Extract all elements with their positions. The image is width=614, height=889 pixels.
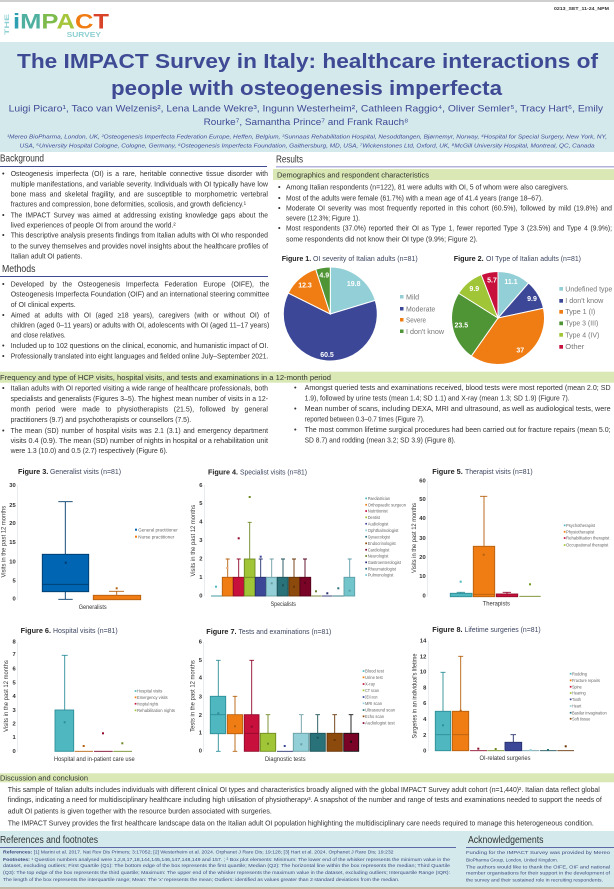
text: frequency left column: • (2, 384, 5, 392)
legend: figure 2: Undefined type (565, 284, 612, 294)
text: methods bullets: of OI clinical experts. (11, 300, 76, 309)
figure 8: lifetime surgeries box plot: 0 (423, 748, 426, 754)
text: methods bullets: • (2, 311, 5, 320)
legend: figure 3: General practitioner (138, 527, 178, 532)
text: frequency right column (294, 383, 611, 444)
text: results bullets (278, 183, 612, 243)
figure 3: generalist visits box plot: 10 (9, 560, 16, 566)
legend: figure 7: Audiologist test (365, 721, 395, 726)
figure 1: OI severity pie chart: 4.9 (319, 272, 329, 280)
title: The IMPACT Survey in Italy: healthcare interactions of (17, 51, 598, 73)
figure 6: hospital visits box plot: Figure 6. (21, 626, 51, 635)
figure 7: tests and examinations box plot: 3 (199, 694, 203, 700)
figure 7: tests and examinations box plot: 5 (199, 658, 203, 664)
figure 4: specialist visits box plot: 6 (199, 483, 203, 489)
figure 5: therapist visits box plot: 20 (419, 555, 426, 561)
logo: The IMPACT Survey: SURVEY (67, 32, 101, 39)
subheading: frequency: Frequency and type of HCP visits, hospital visits, and tests and examinations in a 12-month period (0, 373, 331, 382)
legend: figure 7 (363, 669, 395, 726)
legend: figure 7: DEXA scan (365, 695, 378, 700)
legend: figure 7: CT scan (365, 688, 379, 693)
text: frequency left column (2, 384, 268, 455)
figure 4: specialist visits box plot: Specialist visits (n=81) (240, 468, 307, 476)
figure 6: hospital visits box plot: 4 (12, 694, 16, 700)
figure 5: therapist visits box plot: 60 (419, 478, 426, 484)
text: methods bullets: Included up to 102 questions on the clinical, economic, and humanistic impact of OI. (11, 341, 268, 350)
text: frequency left column: month period were made to physiotherapists (21.5), followed by general (11, 404, 268, 414)
legend: figure 8: Spine (572, 684, 582, 689)
figure 8: lifetime surgeries box plot: Surgeries in an individual's lifetime (412, 653, 418, 738)
legend: figure 4: Orthopaedic surgeon (368, 502, 406, 507)
figure 4: specialist visits box plot: 2 (199, 556, 202, 562)
legend: figure 8: Fracture repairs (572, 678, 601, 683)
figure 1: OI severity pie chart: Figure 1. (282, 254, 311, 263)
figure 3: generalist visits box plot: Figure 3. (18, 467, 48, 476)
heading: results: Results (276, 154, 303, 166)
panel: acknowledgements: the survey and their sustained role in recruiting respondents. (466, 877, 603, 882)
figure 1: OI severity pie chart (282, 254, 445, 361)
legend: figure 4: Nutritionist (368, 509, 388, 514)
legend: figure 5: Psychotherapist (566, 523, 596, 528)
panel: acknowledgements: Funding for the IMPACT Survey was provided by Mereo (466, 850, 610, 855)
panel: acknowledgements: The authors would like to thank the OIFE, OIF and national (466, 864, 610, 869)
figure 8: lifetime surgeries box plot: 6 (423, 701, 427, 707)
legend: figure 6: Hospital visits (137, 689, 163, 694)
panel: references and footnotes (0, 835, 456, 882)
figure 2: OI type pie chart: Figure 2. (454, 254, 484, 263)
text: frequency right column: reported between 0.3–0.7 times (Figure 7). (305, 414, 425, 424)
subheading: discussion: Discussion and conclusion (0, 774, 88, 783)
figure 7: tests and examinations box plot: 6 (199, 640, 203, 646)
legend: figure 1: Mild (406, 292, 419, 301)
text: methods bullets: children (aged 0–11 years) or adults with OI, adolescents with OI (aged 11–17 years) (11, 321, 269, 330)
text: results bullets: • (278, 224, 281, 233)
legend: figure 1 (400, 292, 445, 336)
figure 7: tests and examinations box plot: Tests and examinations (n=81) (238, 627, 331, 636)
figure 4: specialist visits box plot: 1 (199, 575, 203, 581)
text: background bullets: Osteogenesis imperfecta (OI) is a rare, heritable connective tissue disorder with (11, 169, 268, 178)
figure 7: tests and examinations box plot: 4 (199, 676, 203, 682)
figure 5: therapist visits box plot: 30 (419, 536, 426, 542)
text: methods bullets: Osteogenesis Imperfecta Foundation (OIF) and an international steering committee (11, 290, 269, 299)
heading: methods: Methods (2, 264, 36, 275)
figure 4: specialist visits box plot: Visits in the past 12 months (191, 505, 197, 577)
text: background bullets: • (2, 210, 5, 220)
figure 2: OI type pie chart: 37 (516, 348, 524, 354)
figure 8: lifetime surgeries box plot: OI-related surgeries (480, 755, 530, 762)
figure 2: OI type pie chart: 5.7 (487, 278, 497, 284)
panel: references and footnotes: dataset, excluding outliers; First Quartile (Q1): The bottom edge of the box represents the first quartile; Median (Q2): The horizontal line within the box represents the median; Third Quartile (3, 863, 450, 868)
legend: figure 1: I don't know (406, 327, 445, 336)
text: frequency left column: Italian adults with OI reported visiting a wide range of healthcare professionals, both (11, 384, 268, 392)
figure 8: lifetime surgeries box plot: 10 (420, 670, 426, 676)
figure 4: specialist visits box plot: 3 (199, 538, 203, 544)
legend: figure 8: Rodding (572, 671, 587, 676)
legend: figure 4: Gynaecologist (368, 534, 391, 539)
title (17, 51, 598, 100)
text: frequency right column: Mean number of scans, including DEXA, MRI and ultrasound, as well as audiological tests, were (305, 404, 611, 413)
legend: figure 4: Neurologist (368, 554, 389, 559)
panel: discussion and conclusion (0, 773, 614, 828)
figure 5: therapist visits box plot: Therapists (483, 601, 510, 608)
figure 5: therapist visits box plot: 50 (419, 497, 426, 503)
figure 1: OI severity pie chart: OI severity of Italian adults (n=81) (313, 254, 418, 263)
figure 7: tests and examinations box plot: Diagnostic tests (265, 756, 306, 763)
legend: figure 7: Ultrasound scan (365, 708, 395, 713)
authors (9, 104, 603, 128)
figure 1: OI severity pie chart: 19.8 (347, 281, 361, 288)
figure 8: lifetime surgeries box plot (412, 625, 607, 762)
text: frequency left column: visits 0.4 (0.9). The mean (SD) number of nights in hospital or a rehabilitation unit (11, 436, 268, 445)
text: results bullets: severe (12.3%; Figure 1). (286, 214, 360, 223)
legend: figure 8 (570, 671, 607, 721)
legend: figure 4: Audiologist (368, 521, 389, 526)
legend: figure 2: Type 4 (IV) (565, 330, 599, 339)
text: results bullets: Among Italian respondents (n=122), 81 were adults with OI, 5 of whom were also caregivers. (286, 183, 569, 192)
panel: background (0, 154, 269, 261)
text: frequency left column: specialists and generalists (Figures 3–5). The highest mean number of visits in a 12- (11, 394, 268, 403)
figure 6: hospital visits box plot: Hospital visits (n=81) (53, 626, 118, 635)
legend: figure 8: Basilar invagination (572, 710, 607, 715)
text: background bullets: • (2, 169, 5, 178)
panel: acknowledgements: Acknowledgements (468, 835, 544, 846)
figure 7: tests and examinations box plot: 0 (199, 748, 202, 754)
legend: figure 2: I don't know (565, 296, 604, 305)
affiliations: ¹Mereo BioPharma, London, UK, ²Osteogenesis Imperfecta Federation Europe, Heffen, Belgium, ³Sunnaas Rehabilitation Hospital, Nesoddtangen, Bjørnemyr, Norway, ⁴Hospital for Special Surgery, New York, NY, (7, 134, 607, 141)
figure 8: lifetime surgeries box plot: 4 (423, 717, 427, 723)
figure 7: tests and examinations box plot: 2 (199, 713, 202, 719)
figure 6: hospital visits box plot: 8 (12, 640, 16, 646)
legend: figure 6 (135, 689, 176, 713)
figure 8: lifetime surgeries box plot: 12 (420, 654, 426, 660)
panel: acknowledgements: member organisations for their support in the development of (466, 870, 611, 875)
text: frequency right column: • (294, 425, 297, 434)
subheading: demographics: Demographics and respondent characteristics (277, 170, 429, 180)
subheading: demographics (273, 169, 614, 180)
figure 7: tests and examinations box plot: Figure 7. (206, 627, 236, 636)
legend: figure 7: X-ray (365, 682, 376, 687)
figure 8: lifetime surgeries box plot: Figure 8. (432, 625, 462, 634)
figure 2: OI type pie chart: 23.5 (454, 322, 468, 330)
legend: figure 1: Moderate (406, 304, 435, 313)
text: frequency right column: • (294, 404, 297, 413)
figure 4: specialist visits box plot (191, 468, 406, 608)
figure 2: OI type pie chart: 9.9 (527, 296, 537, 303)
footer band (0, 831, 614, 889)
legend: figure 4: Cardiologist (368, 547, 390, 552)
text: discussion (8, 785, 603, 828)
legend: figure 4: Pulmonologist (368, 573, 394, 578)
figure 6: hospital visits box plot: 7 (12, 652, 16, 658)
figure 3: generalist visits box plot: 25 (9, 503, 16, 509)
figure 5: therapist visits box plot: Visits in the past 12 months (412, 503, 418, 573)
figure 2: OI type pie chart: OI Type of Italian adults (n=81) (486, 254, 581, 263)
figure 3: generalist visits box plot: Generalist visits (n=81) (50, 467, 121, 476)
text: frequency right column: Amongst queried tests and examinations received, blood tests were most reported (mean 2.0; SD (305, 383, 611, 392)
figure 1: OI severity pie chart: 12.3 (298, 282, 312, 290)
figure 6: hospital visits box plot: 1 (12, 735, 16, 741)
figure 6: hospital visits box plot: 3 (12, 708, 16, 714)
figure 7: tests and examinations box plot (190, 627, 395, 763)
text: methods bullets: Developed by the Osteogenesis Imperfecta Federation Europe (OIFE), the (11, 280, 269, 289)
legend: figure 4: Endocrinologist (368, 541, 396, 546)
text: methods bullets: • (2, 341, 5, 350)
affiliations: USA, ⁵University Hospital Cologne, Cologne, Germany, ⁶Osteogenesis Imperfecta Foundation, Gaithersburg, MD, USA, ⁷Wickenstones Ltd, Oxford, UK, ⁸McGill University Hospital, Montreal, QC, Canada (20, 143, 595, 150)
text: methods bullets: • (2, 352, 5, 361)
text: frequency right column: 1.9), followed by urine tests (mean 1.4; SD 1.1) and X-ray (mean 1.3; SD 1.9) (Figure 7). (305, 394, 570, 402)
legend: figure 1: Severe (406, 315, 426, 324)
authors: Rourke⁷, Samantha Prince⁷ and Frank Rauch⁸ (204, 117, 408, 128)
figure 2: OI type pie chart (452, 254, 612, 364)
figure 5: therapist visits box plot: 10 (419, 574, 426, 580)
subheading: discussion (0, 773, 614, 783)
figure 5: therapist visits box plot: Therapist visits (n=81) (465, 467, 533, 476)
panel: references and footnotes: The length of the box represents the interquartile range; Mean: The 'x' represents the mean; Outliers: identified as values greater than 2 standard deviations from the median. (3, 877, 399, 882)
legend: figure 4: Ophthalmologist (368, 528, 399, 533)
figure 6: hospital visits box plot: Hospital and in-patient care use (54, 756, 135, 763)
text: results bullets: Most of the adults were female (61.7%) with a mean age of 41.4 years (range 18–67). (286, 193, 543, 202)
figure 3: generalist visits box plot: 0 (12, 596, 16, 602)
figure 6: hospital visits box plot: Visits in the past 12 months (4, 660, 10, 732)
title band (0, 42, 614, 152)
panel: results demographics (273, 154, 614, 243)
figure 6: hospital visits box plot (4, 626, 176, 763)
text: frequency right column: • (294, 383, 297, 392)
legend: figure 8: Tooth (572, 697, 581, 702)
legend: figure 3: Nurse practitioner (138, 534, 175, 539)
text: results bullets: • (278, 193, 281, 202)
figure 3: generalist visits box plot: 5 (12, 578, 16, 584)
legend: figure 4: Gastroenterologist (368, 560, 402, 565)
logo: The IMPACT Survey: iMPACT (13, 10, 109, 34)
figure 5: therapist visits box plot: 0 (422, 594, 426, 600)
figure 5: therapist visits box plot (412, 467, 610, 608)
legend: figure 7: Echo scan (365, 714, 384, 719)
panel: methods (0, 264, 270, 361)
text: results bullets: • (278, 183, 281, 192)
legend: figure 5: Rehabilitation therapist (566, 536, 610, 541)
text: background bullets: This descriptive analysis presents findings from Italian adults with OI who responded (11, 231, 268, 240)
legend: figure 4: Paediatrician (368, 496, 390, 501)
figure 7: tests and examinations box plot: 1 (199, 730, 203, 736)
figure 1: OI severity pie chart: 60.5 (320, 352, 334, 359)
text: frequency left column: • (2, 426, 5, 435)
text: methods bullets (2, 280, 270, 361)
text: background bullets: multiple manifestations, and variable severity. Individuals with OI typically have low (11, 179, 269, 188)
text: methods bullets: Aimed at adults with OI (aged ≥18 years), caregivers (with or without OI) of (11, 311, 270, 320)
legend: figure 7: Urine test (365, 675, 383, 680)
legend: figure 6: Emergency visits (137, 695, 168, 700)
figure 4: specialist visits box plot: 5 (199, 501, 203, 507)
text: background bullets (2, 169, 269, 261)
text: frequency right column: SD 8.7) and rodding (mean 3.2; SD 3.9) (Figure 8). (305, 436, 456, 444)
legend: figure 2: Other (565, 342, 585, 351)
figure 6: hospital visits box plot: 6 (12, 666, 16, 672)
legend: figure 7: Blood test (365, 669, 385, 674)
legend: figure 6: Rehabilitation nights (137, 708, 176, 713)
figure 5: therapist visits box plot: Figure 5. (432, 467, 463, 476)
text: background bullets: The IMPACT Survey was aimed at addressing existing knowledge gaps about the (11, 210, 268, 220)
title: people with osteogenesis imperfecta (111, 78, 503, 100)
legend: figure 5 (564, 523, 610, 548)
legend: figure 2: Type 3 (III) (565, 319, 598, 328)
text: results bullets: • (278, 203, 281, 212)
figure 3: generalist visits box plot (2, 467, 178, 611)
authors: Luigi Picaro¹, Taco van Welzenis², Lena Lande Wekre³, Ingunn Westerheim², Cathleen Raggio⁴, Oliver Semler⁵, Tracy Hart⁶, Emily (9, 104, 603, 114)
figure 8: lifetime surgeries box plot: Lifetime surgeries (n=81) (464, 625, 541, 634)
text: frequency left column: were 1.3 (10.0) and 0.5 (2.7) respectively (Figure 6). (10, 446, 168, 455)
text: background bullets: fractures and compression, bone deformities, scoliosis, and growth deficiency.¹ (11, 199, 246, 208)
text: background bullets: bone mass and skeletal fragility, and are susceptible to morphometric vertebral (11, 189, 268, 198)
figure 8: lifetime surgeries box plot: 8 (423, 686, 427, 692)
figure 4: specialist visits box plot: 0 (199, 594, 202, 600)
text: methods bullets: • (2, 280, 5, 289)
panel: references and footnotes: (Q3): The top edge of the box represents the third quartile; Maximum: The upper end of the whisker represents the maximum value in the dataset, excluding outliers; Interquartile Range (IQR): (3, 870, 450, 875)
figure 3: generalist visits box plot: 20 (9, 521, 16, 527)
figure 6: hospital visits box plot: 0 (12, 749, 16, 755)
panel: acknowledgements: BioPharma Group, London, United Kingdom. (466, 857, 558, 862)
figure 3: generalist visits box plot: Generalists (79, 604, 107, 611)
legend: figure 3 (135, 527, 178, 539)
text: results bullets: some respondents did not know their OI type (9.9%; Figure 2). (286, 234, 478, 243)
figure 5: therapist visits box plot: 40 (419, 516, 426, 522)
panel: acknowledgements (466, 835, 614, 882)
figure 6: hospital visits box plot: 2 (12, 722, 16, 728)
legend: figure 2: Type 1 (I) (565, 307, 595, 316)
figure 8: lifetime surgeries box plot: 2 (423, 733, 426, 739)
heading: background: Background (0, 154, 44, 164)
legend: figure 7: MRI scan (365, 701, 382, 706)
figure 3: generalist visits box plot: 15 (9, 540, 16, 546)
poster code: 0213_SET_11-24_NPM (554, 6, 609, 11)
section: frequency and type of visits (0, 372, 614, 455)
text: methods bullets: and close relatives. (11, 331, 66, 340)
panel: references and footnotes: References: [1] Marini et al. 2017. Nat Rev Dis Primers; 3:17052; [2] Westerheim et al. 2024. Orphanet J Rare Dis; 19:128; [3] Hart et al. 2024. Orphanet J Rare Dis; 19:232 (3, 850, 394, 854)
legend: figure 8: Soft tissue (572, 716, 591, 721)
figure 3: generalist visits box plot: 30 (9, 483, 16, 489)
legend: figure 8: Hearing (572, 691, 586, 696)
text: frequency left column: practitioners (9.7) and psychotherapists or counsellors (7.5). (11, 415, 191, 424)
panel: references and footnotes: References and footnotes (0, 835, 98, 846)
figure 2: OI type pie chart: 9.9 (469, 286, 479, 293)
affiliations (7, 134, 607, 150)
legend: figure 4: Rheumatologist (368, 566, 397, 571)
text: frequency left column: The mean (SD) number of hospital visits was 2.1 (3.1) and emergency department (11, 426, 268, 435)
legend: figure 4 (365, 496, 406, 578)
figure 7: tests and examinations box plot: Tests in the past 12 months (190, 660, 196, 732)
panel: references and footnotes: Footnotes: ¹ Question numbers analysed were 1,2,8,17,18,144,145,146,147,148,149 and 157. ; ² Box plot elements: Minimum: The lower end of the whisker represents the minimum value in the (3, 857, 450, 862)
figure 3: generalist visits box plot: Visits in the past 12 months (2, 506, 8, 578)
figure 4: specialist visits box plot: Specialists (271, 601, 296, 608)
logo: The IMPACT Survey: THE (4, 13, 11, 35)
legend: figure 5: Occupational therapist (566, 543, 609, 548)
subheading: frequency (0, 372, 614, 383)
legend: figure 8: Heart (572, 704, 582, 709)
text: discussion: adult OI patients is given together with the resource burden associated with surgeries. (8, 806, 272, 816)
text: background bullets: lived experiences of people OI from around the world.² (11, 220, 176, 229)
figure 8: lifetime surgeries box plot: 14 (420, 638, 427, 644)
text: background bullets: • (2, 230, 5, 240)
text: background bullets: Italian adult OI patients. (11, 252, 82, 261)
figure 2: OI type pie chart: 11.1 (504, 279, 518, 286)
text: background bullets: to the survey themselves and provides novel insights about the healthcare profiles of (11, 241, 269, 250)
figure 6: hospital visits box plot: 5 (12, 680, 16, 686)
legend: figure 2 (559, 284, 612, 351)
text: methods bullets: Professionally translated into eight languages and fielded online July–September 2021. (11, 352, 268, 361)
legend: figure 5: Physiotherapist (566, 529, 595, 534)
legend: figure 6: Hospital nights (137, 701, 159, 706)
figure 4: specialist visits box plot: 4 (199, 520, 203, 526)
legend: figure 4: Dentist (368, 515, 381, 520)
figure 4: specialist visits box plot: Figure 4. (208, 468, 238, 476)
